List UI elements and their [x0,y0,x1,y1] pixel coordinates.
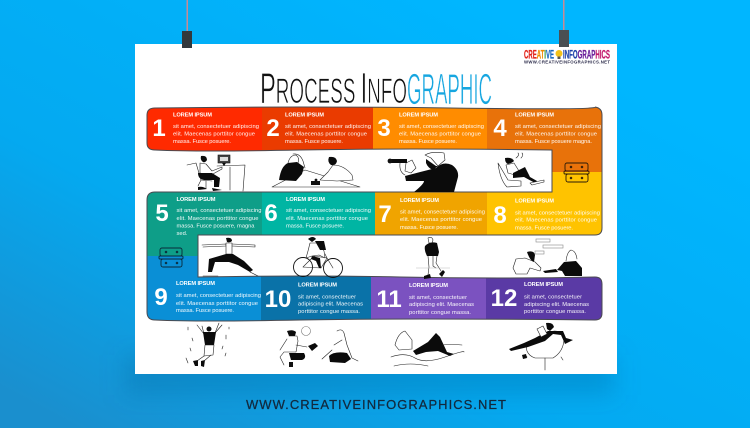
hanger left [182,0,192,48]
step 4: elit. Maecenas porttitor congue [515,132,597,138]
step 8: sit amet, consectetuer adipiscing [515,210,600,216]
step 7: elit. Maecenas porttitor congue [400,217,482,223]
illustration: walking person [416,237,450,279]
step 1 [152,112,259,145]
step 1: massa. Fusce posuere. [173,139,231,145]
step 3: 3 [377,115,391,142]
step 12 [491,282,589,315]
step 5: LOREM IPSUM [176,197,216,203]
illustration: person at desk [187,155,245,191]
step 2: elit. Maecenas porttitor congue [285,132,367,138]
step 9: 9 [154,284,168,311]
illustration: two people on mat [272,154,360,187]
title: PROCESS INFO [260,64,407,113]
step 1: sit amet, consectetuer adipiscing [173,124,259,130]
step 2: LOREM IPSUM [285,112,324,118]
step 5: 5 [155,200,169,227]
step 7: massa. Fusce posuere. [400,225,458,231]
step 5: elit. Maecenas porttitor congue [176,216,258,222]
step 4 [493,112,601,145]
step 5: sit amet, consectetuer adipiscing [176,208,262,214]
step 3: LOREM IPSUM [399,112,438,118]
step 8: massa. Fusce posuere. [515,226,573,232]
step 5 [155,197,262,237]
step 7 [378,198,485,231]
step 7: 7 [378,201,392,228]
illustration: two people at table [513,239,582,276]
step 1: elit. Maecenas porttitor congue [173,132,255,138]
illustration: man with binoculars [388,152,458,192]
step 10: sit amet, consectetuer [298,294,356,300]
step 8 [493,198,600,232]
step 6: elit. Maecenas porttitor congue [286,216,368,222]
step 10 [265,282,363,315]
step 8: elit. Maecenas porttitor congue [515,218,597,224]
step 11: adipiscing elit. Maecenas [409,302,474,308]
process ribbon [147,106,603,322]
step 3: sit amet, consectetuer adipiscing [399,124,484,130]
illustration: jumping person [186,323,229,367]
step 8: LOREM IPSUM [515,198,554,204]
illustration: cyclist [294,237,342,278]
illustration: yoga pose [202,238,258,276]
logo: WWW.CREATIVEINFOGRAPHICS.NET [524,60,610,64]
step 10: LOREM IPSUM [298,282,337,288]
step 3: elit. Maecenas porttitor congue [399,132,481,138]
step 6 [264,197,371,230]
illustration: people sitting with tablet [280,326,358,367]
step 6: 6 [264,200,278,227]
step 12: adipiscing elit. Maecenas [524,302,589,308]
step 4: 4 [493,115,507,142]
step 11: 11 [376,286,402,313]
icon: hinge teal [159,248,183,267]
step 10: 10 [265,286,291,313]
step 10: porttitor congue massa. [298,309,360,315]
paper shadow [125,355,615,395]
logo: INFOGRAPHICS [563,50,610,62]
step 1: LOREM IPSUM [173,112,212,118]
step 6: sit amet, consectetuer adipiscing [286,208,371,214]
step 3 [377,112,484,145]
step 3: massa. Fusce posuere. [399,139,457,145]
step 11: sit amet, consectetuer [409,295,467,301]
icon: hinge orange [564,163,589,182]
text: GRAPHIC [407,65,492,114]
website url: WWW.CREATIVEINFOGRAPHICS.NET [246,397,506,412]
step 11 [376,283,474,316]
step 12: porttitor congue massa. [524,309,586,315]
illustration: person reading in chair [509,323,573,370]
step 9: massa. Fusce posuere. [176,308,234,314]
step 11: LOREM IPSUM [409,283,448,289]
step 9: LOREM IPSUM [176,281,215,287]
step 12: LOREM IPSUM [524,282,563,288]
step 6: LOREM IPSUM [286,197,325,203]
step 9 [154,281,261,314]
step 2 [266,112,371,145]
step 4: massa. Fusce posuere magna. [515,139,592,145]
step 2: sit amet, consectetuer adipiscing [285,124,371,130]
step 8: 8 [493,202,507,229]
logo: CREATIVE [524,50,554,62]
step 2: 2 [266,115,280,142]
step 2: massa. Fusce posuere. [285,139,343,145]
step 6: massa. Fusce posuere. [286,224,344,230]
step 4: sit amet, consectetuer adipiscing [515,124,601,130]
step 7: LOREM IPSUM [400,198,439,204]
step 12: 12 [491,285,517,312]
illustration: person in armchair [498,153,544,187]
step 9: elit. Maecenas porttitor congue [176,301,258,307]
illustration: person lying on water [391,331,464,366]
step 7: sit amet, consectetuer adipiscing [400,210,485,216]
step 5: sed. [176,231,188,237]
step 10: adipiscing elit. Maecenas [298,302,363,308]
step 12: sit amet, consectetuer [524,294,582,300]
step 4: LOREM IPSUM [515,112,554,118]
step 5: massa. Fusce posuere, magna [176,224,255,230]
step 1: 1 [152,115,166,142]
logo [524,50,610,64]
step 9: sit amet, consectetuer adipiscing [176,293,261,299]
step 11: porttitor congue massa. [409,310,471,316]
hanger right [559,0,569,47]
poster sheet [135,44,617,374]
